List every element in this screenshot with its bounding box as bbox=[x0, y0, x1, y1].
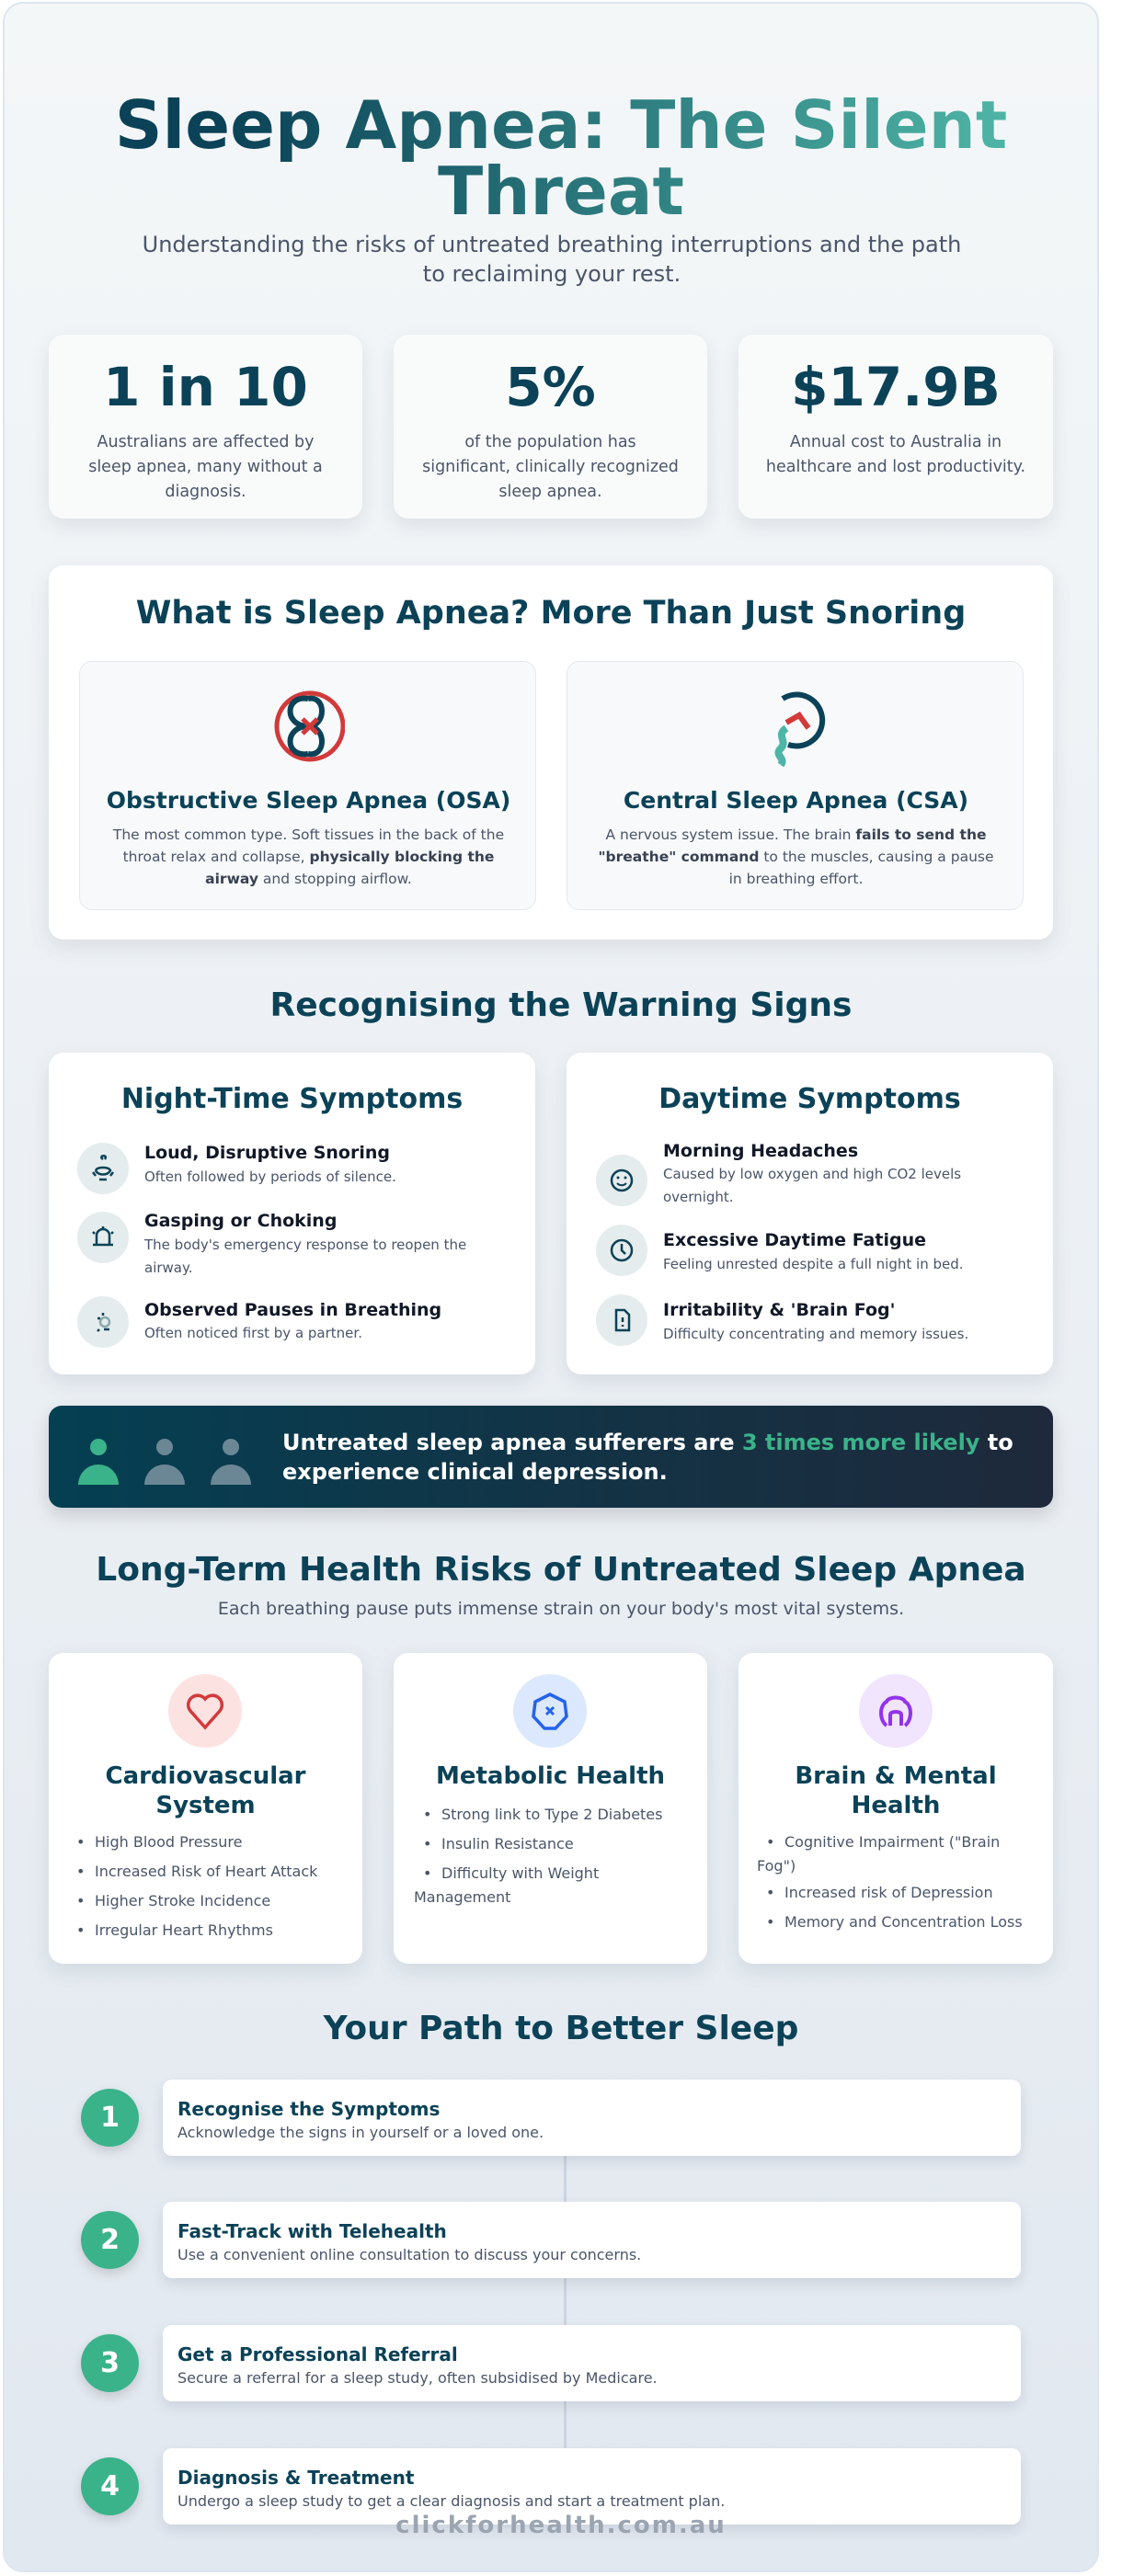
panel: metabolic: Difficulty with Weight bbox=[441, 1864, 599, 1882]
icon: metabolic bbox=[513, 1674, 587, 1748]
step 1: Acknowledge the signs in yourself or a loved one. bbox=[177, 2124, 544, 2141]
stat card: 5%: sleep apnea. bbox=[498, 483, 602, 501]
item: brain fog: Difficulty concentrating and memory issues. bbox=[663, 1326, 968, 1342]
step 1 bbox=[77, 2080, 1025, 2164]
stat card: 5%: of the population has bbox=[464, 433, 636, 451]
item: fatigue: Excessive Daytime Fatigue bbox=[663, 1230, 926, 1250]
item: snoring: Loud, Disruptive Snoring bbox=[144, 1143, 390, 1163]
panel: cardiovascular: Higher Stroke Incidence bbox=[95, 1892, 270, 1909]
stat card: 1 in 10: 1 in 10 bbox=[103, 356, 308, 418]
panel: night-time symptoms bbox=[49, 1053, 535, 1374]
item: pauses bbox=[77, 1296, 441, 1348]
step 4 bbox=[77, 2448, 1025, 2534]
stat card: 1 in 10 bbox=[49, 335, 362, 519]
subheading: Each breathing pause puts immense strain on your body's most vital systems. bbox=[218, 1599, 904, 1619]
stat card: 5%: significant, clinically recognized bbox=[422, 458, 679, 476]
step 3: Secure a referral for a sleep study, often subsidised by Medicare. bbox=[177, 2369, 658, 2387]
step 1: 1 bbox=[100, 2102, 120, 2134]
stat card: $17.9B bbox=[738, 335, 1053, 519]
icon: heart bbox=[168, 1674, 242, 1748]
panel: metabolic: Metabolic Health bbox=[436, 1762, 665, 1790]
panel: brain & mental: Cognitive Impairment ("Brain bbox=[784, 1833, 1000, 1851]
box: OSA bbox=[79, 661, 536, 910]
item: brain fog: Irritability & 'Brain Fog' bbox=[663, 1300, 895, 1320]
step 2: Fast-Track with Telehealth bbox=[177, 2220, 447, 2242]
OSA text: The most common type. Soft tissues in the back of the throat relax and collapse, physically blocking the airway and stopping airflow. bbox=[113, 826, 504, 887]
stat card: $17.9B: Annual cost to Australia in healthcare and lost productivity. bbox=[766, 433, 1025, 476]
step 3 bbox=[77, 2325, 1025, 2411]
heading: What is Sleep Apnea? More Than Just Snoring bbox=[136, 595, 966, 632]
step 3: 3 bbox=[100, 2347, 120, 2379]
panel: cardiovascular: Irregular Heart Rhythms bbox=[95, 1921, 273, 1939]
stat card: 5%: 5% bbox=[505, 356, 596, 418]
icon: three people bbox=[78, 1439, 251, 1485]
item: snoring: Often followed by periods of silence. bbox=[144, 1168, 396, 1185]
step 1: Recognise the Symptoms bbox=[177, 2098, 440, 2120]
CSA title: Central Sleep Apnea (CSA) bbox=[624, 787, 968, 814]
item: fatigue: Feeling unrested despite a full night in bed. bbox=[663, 1256, 964, 1272]
panel: cardiovascular: System bbox=[155, 1792, 256, 1819]
step 4: Undergo a sleep study to get a clear diagnosis and start a treatment plan. bbox=[177, 2492, 725, 2510]
title: Sleep Apnea: The Silent bbox=[115, 86, 1007, 164]
panel: cardiovascular: High Blood Pressure bbox=[95, 1833, 242, 1851]
title bbox=[0, 92, 1122, 224]
panel: brain & mental: Increased risk of Depression bbox=[784, 1884, 993, 1901]
panel: cardiovascular: Cardiovascular bbox=[105, 1762, 305, 1790]
heading: long-term risks: Long-Term Health Risks of Untreated Sleep Apnea bbox=[96, 1551, 1026, 1589]
panel: cardiovascular: Increased Risk of Heart Attack bbox=[95, 1863, 317, 1880]
item: gasping: Gasping or Choking bbox=[144, 1211, 337, 1231]
OSA title: Obstructive Sleep Apnea (OSA) bbox=[107, 787, 510, 814]
box: CSA bbox=[567, 661, 1024, 910]
icon: brain bbox=[859, 1674, 933, 1748]
subtitle: Understanding the risks of untreated breathing interruptions and the path to reclaiming your rest. bbox=[143, 232, 961, 287]
panel: metabolic: Strong link to Type 2 Diabetes bbox=[441, 1806, 662, 1823]
panel: night-time symptoms: Night-Time Symptoms bbox=[121, 1083, 463, 1115]
icon: brain signal bbox=[774, 691, 826, 767]
step 4: 4 bbox=[100, 2470, 120, 2502]
heading: path to better sleep: Your Path to Better Sleep bbox=[324, 2010, 798, 2047]
heading: warning signs: Recognising the Warning Signs bbox=[270, 986, 852, 1024]
stat card: 5% bbox=[394, 335, 707, 519]
panel: cardiovascular bbox=[49, 1653, 362, 1964]
footer: website: clickforhealth.com.au bbox=[395, 2512, 727, 2539]
item: pauses: Often noticed first by a partner. bbox=[144, 1325, 362, 1341]
item: snoring bbox=[77, 1143, 396, 1194]
connector line bbox=[564, 2151, 567, 2455]
item: headaches: Morning Headaches bbox=[663, 1141, 858, 1161]
panel: brain & mental bbox=[738, 1653, 1053, 1964]
item: pauses: Observed Pauses in Breathing bbox=[144, 1300, 441, 1320]
panel: metabolic bbox=[394, 1653, 707, 1964]
item: headaches: Caused by low oxygen and high CO2 levels overnight. bbox=[663, 1166, 961, 1205]
panel: brain & mental: Memory and Concentration Loss bbox=[784, 1913, 1023, 1931]
panel: brain & mental: Health bbox=[852, 1792, 940, 1819]
step 4: Diagnosis & Treatment bbox=[177, 2467, 414, 2489]
stat card: $17.9B: $17.9B bbox=[791, 356, 1001, 418]
step 2: 2 bbox=[100, 2224, 120, 2256]
item: gasping: The body's emergency response to reopen the airway. bbox=[144, 1237, 466, 1276]
callout text: Untreated sleep apnea sufferers are 3 times more likely to experience clinical depression. bbox=[282, 1430, 1013, 1485]
panel: daytime symptoms: Daytime Symptoms bbox=[658, 1083, 961, 1115]
CSA text: A nervous system issue. The brain fails to send the "breathe" command to the muscles, causing a pause in breathing effort. bbox=[598, 826, 994, 887]
panel: brain & mental: Brain & Mental bbox=[795, 1762, 997, 1790]
panel: metabolic: Insulin Resistance bbox=[441, 1835, 574, 1852]
step 3: Get a Professional Referral bbox=[177, 2343, 458, 2365]
title: Threat bbox=[438, 153, 684, 230]
stat card: 1 in 10: Australians are affected by sleep apnea, many without a diagnosis. bbox=[88, 433, 323, 501]
item: headaches bbox=[596, 1141, 961, 1206]
panel: metabolic: Management bbox=[414, 1888, 510, 1906]
panel: what is sleep apnea bbox=[49, 565, 1053, 940]
panel: daytime symptoms bbox=[567, 1053, 1053, 1374]
panel: brain & mental: Fog") bbox=[757, 1857, 796, 1875]
item: brain fog bbox=[596, 1294, 968, 1346]
item: gasping bbox=[77, 1211, 466, 1276]
step 2 bbox=[77, 2202, 1025, 2287]
item: fatigue bbox=[596, 1225, 964, 1276]
step 2: Use a convenient online consultation to discuss your concerns. bbox=[177, 2246, 641, 2263]
callout banner: depression bbox=[49, 1406, 1053, 1508]
icon: obstructed airway bbox=[274, 691, 345, 761]
